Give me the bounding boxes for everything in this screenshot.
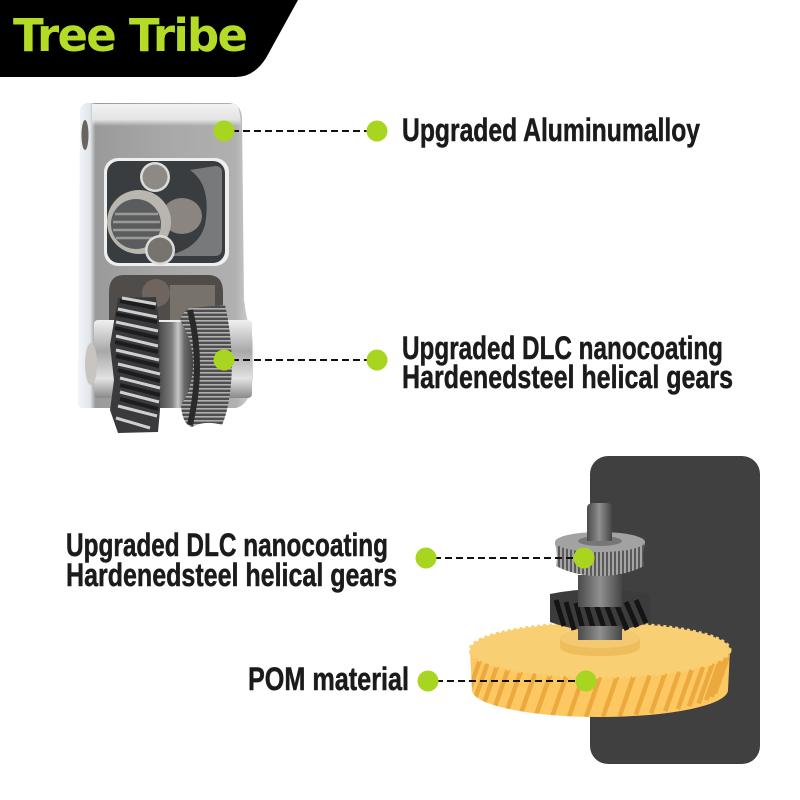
logo text: Tree Tribe bbox=[13, 9, 248, 62]
upper window bbox=[104, 158, 229, 266]
block body bbox=[78, 103, 253, 408]
dark helical gear bbox=[550, 575, 651, 640]
lower window bbox=[109, 275, 223, 335]
label: Upgraded Aluminumalloy bbox=[402, 112, 700, 148]
label: Hardenedsteel helical gears bbox=[66, 557, 397, 593]
callout: upper DLC gears bbox=[214, 330, 733, 395]
middle spool bbox=[155, 322, 197, 408]
POM yellow gear bbox=[466, 623, 730, 717]
callout: lower DLC gears bbox=[66, 527, 594, 593]
collar bbox=[560, 638, 640, 656]
worm gear small bbox=[555, 532, 645, 576]
label: Upgraded DLC nanocoating bbox=[66, 527, 388, 563]
callout: POM material bbox=[248, 661, 596, 697]
label: POM material bbox=[248, 661, 409, 697]
helical gear bbox=[110, 297, 160, 433]
dark background panel bbox=[590, 456, 760, 764]
label bbox=[66, 527, 397, 593]
logo banner bbox=[0, 0, 298, 77]
callout: aluminum alloy bbox=[214, 112, 700, 148]
worm gear bbox=[180, 305, 232, 427]
label bbox=[402, 330, 733, 395]
axle cylinder bbox=[94, 320, 252, 398]
lower neck bbox=[578, 575, 622, 639]
gear assembly photo bbox=[466, 503, 730, 717]
aluminum extruder photo bbox=[78, 103, 253, 433]
shaft top bbox=[587, 503, 612, 541]
